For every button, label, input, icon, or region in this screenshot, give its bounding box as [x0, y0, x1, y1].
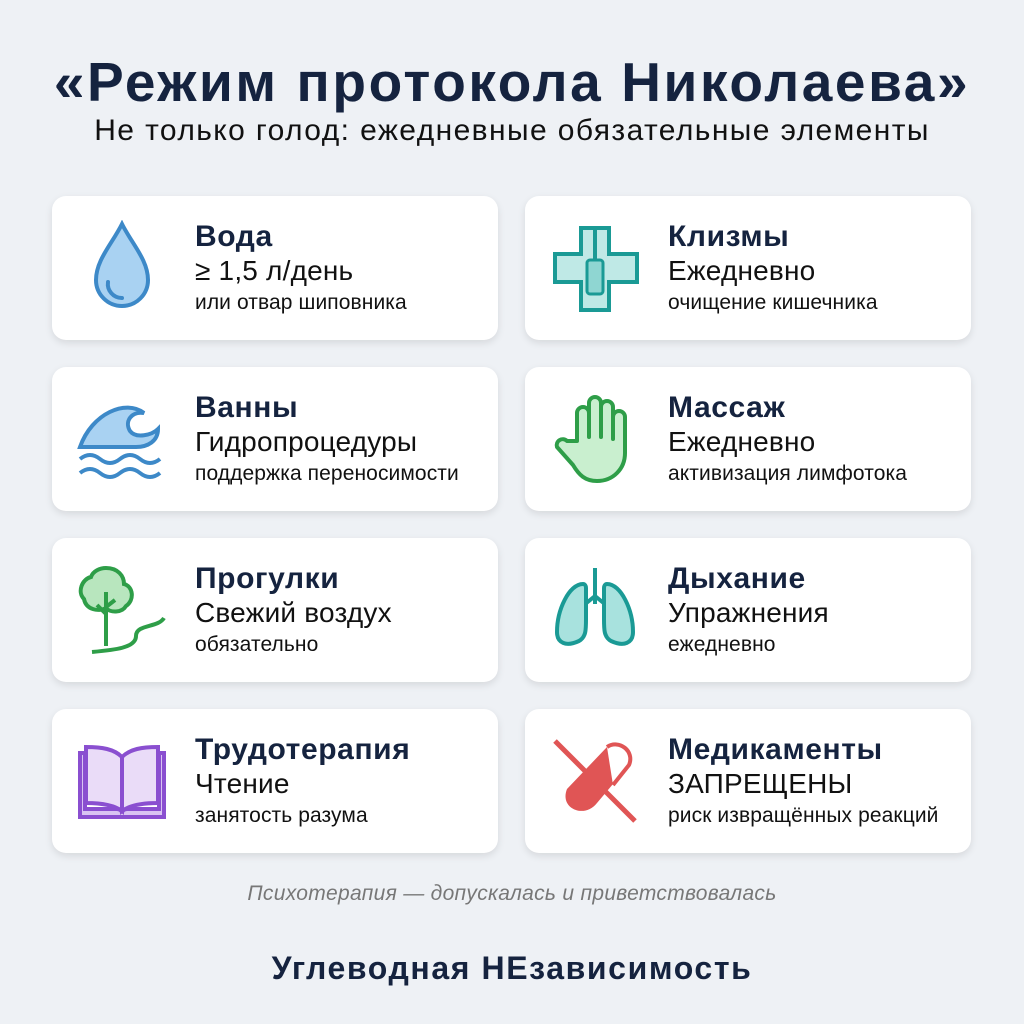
text: baths: Гидропроцедуры [195, 426, 417, 457]
icon: tree [78, 566, 166, 654]
icon: lungs [555, 568, 635, 646]
panel: massage [525, 367, 971, 511]
text: baths [195, 391, 459, 485]
text: enemas: Ежедневно [668, 255, 815, 286]
text: breathing: Упражнения [668, 597, 829, 628]
text: walks: обязательно [195, 633, 318, 656]
text: breathing: Дыхание [668, 562, 806, 595]
panel: enemas [525, 196, 971, 340]
icon: water drop [94, 220, 150, 308]
text: water: или отвар шиповника [195, 291, 407, 314]
panel: breathing [525, 538, 971, 682]
text: work therapy: Чтение [195, 768, 290, 799]
text: enemas: Клизмы [668, 220, 789, 253]
icon: crossed pill [553, 739, 637, 823]
text: work therapy: Трудотерапия [195, 733, 410, 766]
icon: cross [553, 226, 639, 312]
text: water: ≥ 1,5 л/день [195, 255, 353, 286]
subtitle: Не только голод: ежедневные обязательные элементы [94, 114, 930, 147]
text: breathing [668, 562, 829, 656]
panel: work therapy [52, 709, 498, 853]
panel: medications [525, 709, 971, 853]
icon: wave [77, 406, 162, 479]
text: baths: Ванны [195, 391, 298, 424]
text: medications: риск извращённых реакций [668, 804, 938, 827]
text: medications: ЗАПРЕЩЕНЫ [668, 768, 852, 799]
text: walks: Свежий воздух [195, 597, 392, 628]
panel: water [52, 196, 498, 340]
text: work therapy [195, 733, 410, 827]
title: «Режим протокола Николаева» [54, 51, 970, 113]
text: breathing: ежедневно [668, 633, 776, 656]
footer brand: Углеводная НЕзависимость [272, 950, 752, 986]
text: baths: поддержка переносимости [195, 462, 459, 485]
text: enemas [668, 220, 878, 314]
text: massage: активизация лимфотока [668, 462, 907, 485]
text: enemas: очищение кишечника [668, 291, 878, 314]
text: water: Вода [195, 220, 273, 253]
icon: hand [554, 395, 627, 483]
footnote: Психотерапия — допускалась и приветствовалась [247, 882, 777, 905]
text: medications: Медикаменты [668, 733, 883, 766]
text: walks: Прогулки [195, 562, 339, 595]
panel: walks [52, 538, 498, 682]
text: massage: Ежедневно [668, 426, 815, 457]
text: walks [195, 562, 392, 656]
text: massage [668, 391, 907, 485]
text: medications [668, 733, 938, 827]
text: work therapy: занятость разума [195, 804, 368, 827]
panel: baths [52, 367, 498, 511]
text: water [195, 220, 407, 314]
text: massage: Массаж [668, 391, 785, 424]
icon: book [78, 745, 166, 819]
